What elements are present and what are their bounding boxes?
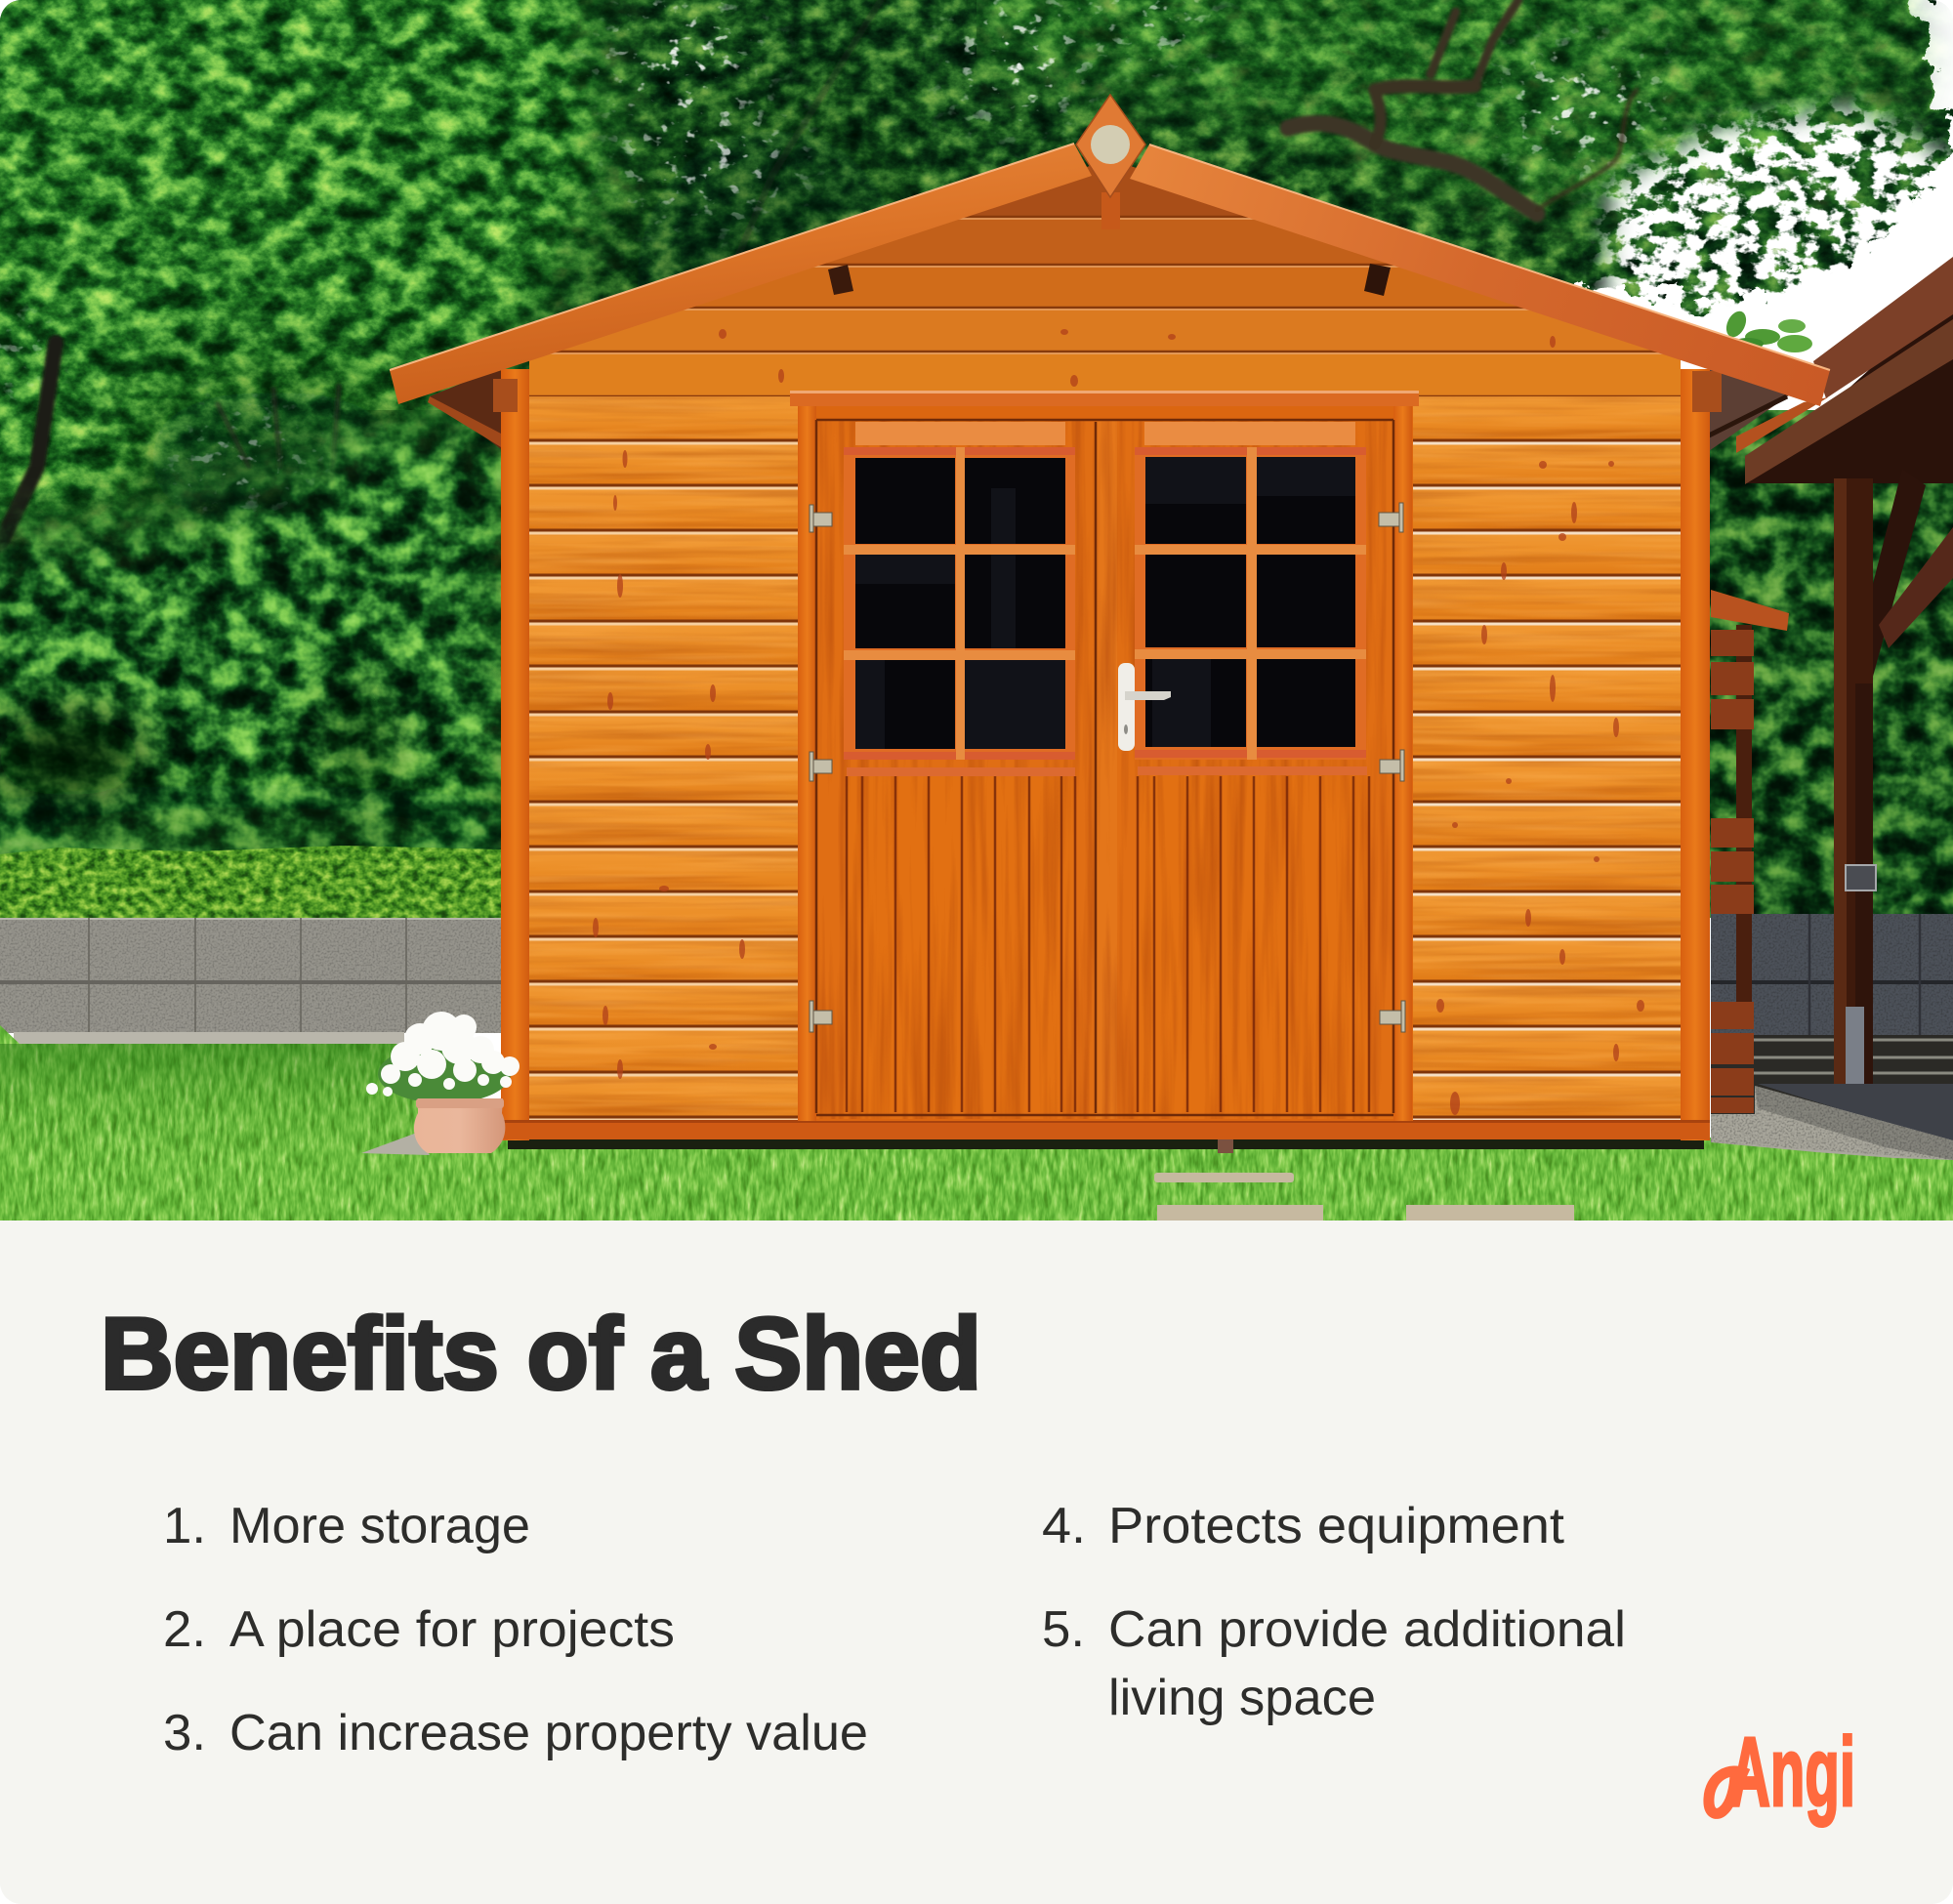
door handle xyxy=(1118,663,1171,751)
roof finial with round disc xyxy=(1076,95,1145,197)
background tree canopy xyxy=(0,0,1953,879)
title: Benefits of a Shed xyxy=(101,1298,981,1411)
window frames xyxy=(844,447,1367,776)
upper door panels xyxy=(855,422,1355,445)
potted white flowers xyxy=(361,1012,519,1155)
log store beside the shed xyxy=(1711,590,1789,1113)
clipped hedge xyxy=(0,846,501,918)
door hinges xyxy=(810,503,1405,1032)
list item 1: 1. xyxy=(163,1498,206,1554)
left wall boards xyxy=(529,396,798,1120)
paving by the pot xyxy=(361,1133,430,1155)
roof fascia boards xyxy=(390,144,1830,406)
list item 3: 3. xyxy=(163,1705,206,1761)
logo: Angi xyxy=(1709,1718,1855,1827)
list item 5 xyxy=(1042,1601,1626,1726)
retaining wall left xyxy=(0,916,501,1044)
list item 2: 2. xyxy=(163,1601,206,1658)
panel: photo of a wooden shed in a garden xyxy=(0,0,1953,1221)
shed shadow line xyxy=(508,1138,1704,1149)
lawn xyxy=(0,1025,1953,1221)
list item 4: Protects equipment xyxy=(1108,1498,1565,1554)
corner posts and base board xyxy=(501,369,1710,1153)
list item 2: A place for projects xyxy=(229,1601,675,1658)
door header beam xyxy=(790,391,1419,406)
lower door panels xyxy=(847,775,1369,1112)
stepping stones xyxy=(1154,1173,1574,1221)
carport structure xyxy=(1736,257,1953,1096)
terracotta pot xyxy=(414,1098,505,1153)
left bushes xyxy=(0,410,501,854)
shed xyxy=(390,95,1830,1153)
list item 5: living space xyxy=(1108,1670,1376,1726)
foliage of plant xyxy=(378,1045,511,1103)
paving, gravel and path at right xyxy=(1711,1084,1953,1160)
door wood grain xyxy=(816,420,1393,1119)
list: left column xyxy=(163,1498,868,1761)
wood knots xyxy=(593,329,1644,1115)
pane reflections xyxy=(855,457,1355,749)
panel: benefits text xyxy=(101,1298,1855,1828)
tree branches xyxy=(0,0,1637,545)
panel background xyxy=(0,1221,1953,1904)
list item 4: 4. xyxy=(1042,1498,1086,1554)
double doors xyxy=(798,404,1413,1121)
tuft of leaves behind the right eave xyxy=(1723,309,1812,352)
list item 1: More storage xyxy=(229,1498,530,1554)
logo: Angi: Angi xyxy=(1729,1718,1855,1827)
list item 5: 5. xyxy=(1042,1601,1085,1658)
window panes xyxy=(855,457,1355,749)
door edges xyxy=(816,420,1393,1115)
sky xyxy=(0,0,1953,1221)
gable boards xyxy=(529,156,1681,400)
list: right column xyxy=(1042,1498,1626,1726)
list item 5: Can provide additional xyxy=(1108,1601,1626,1658)
glazing bars xyxy=(844,447,1366,760)
right wall boards xyxy=(1412,396,1681,1120)
retaining wall right xyxy=(1711,914,1953,1118)
soffits under the eaves xyxy=(428,361,1789,451)
white blossoms xyxy=(366,1012,519,1097)
rafter brackets xyxy=(493,192,1722,412)
right bushes behind carport xyxy=(1710,410,1953,918)
list item 3: Can increase property value xyxy=(229,1705,868,1761)
